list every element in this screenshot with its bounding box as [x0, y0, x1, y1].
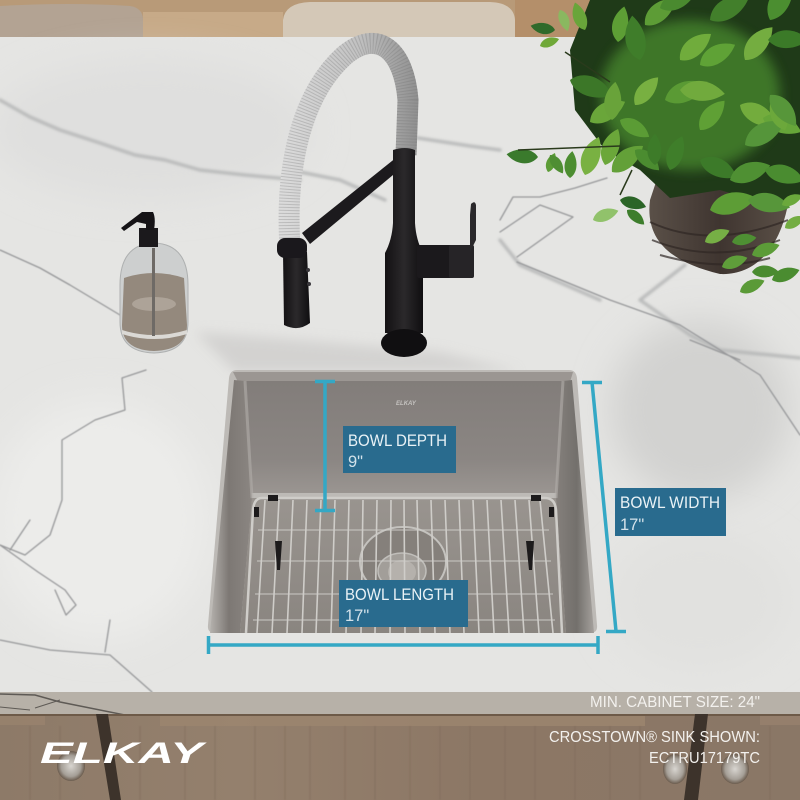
faucet	[277, 43, 476, 357]
cabinet knobs	[57, 751, 749, 784]
plant pot	[649, 160, 790, 274]
dimension: bowl length	[208, 636, 598, 654]
label: bowl depth	[343, 426, 456, 473]
label: bowl width: 17"	[620, 516, 644, 534]
chair right	[283, 2, 515, 37]
dimension: bowl depth	[315, 381, 335, 510]
bottom grid rack	[246, 495, 562, 633]
label: bowl depth: 9"	[348, 453, 363, 471]
marble veins	[0, 100, 800, 692]
label: bowl width	[615, 488, 726, 536]
background: floor behind counter	[0, 0, 800, 37]
text: sink shown: CROSSTOWN® SINK SHOWN:	[549, 729, 760, 746]
text: minimum cabinet size: MIN. CABINET SIZE: 24"	[590, 694, 760, 711]
label: bowl length	[339, 580, 468, 627]
dimension: bowl width	[582, 382, 626, 632]
stainless steel sink	[208, 370, 597, 633]
chair left	[0, 4, 143, 37]
plant foliage	[506, 0, 800, 297]
label: bowl length: BOWL LENGTH	[345, 586, 454, 604]
text: model number: ECTRU17179TC	[649, 750, 760, 767]
wood cabinets	[0, 714, 800, 800]
label: bowl width: BOWL WIDTH	[620, 494, 720, 512]
counter front edge	[0, 692, 800, 716]
logo: Elkay: ELKAY	[40, 737, 208, 770]
label: bowl depth: BOWL DEPTH	[348, 432, 447, 450]
soap dispenser	[120, 212, 188, 353]
label: bowl length: 17"	[345, 607, 369, 625]
sink drain	[360, 527, 446, 597]
stainless steel sink: ELKAY	[396, 401, 417, 407]
